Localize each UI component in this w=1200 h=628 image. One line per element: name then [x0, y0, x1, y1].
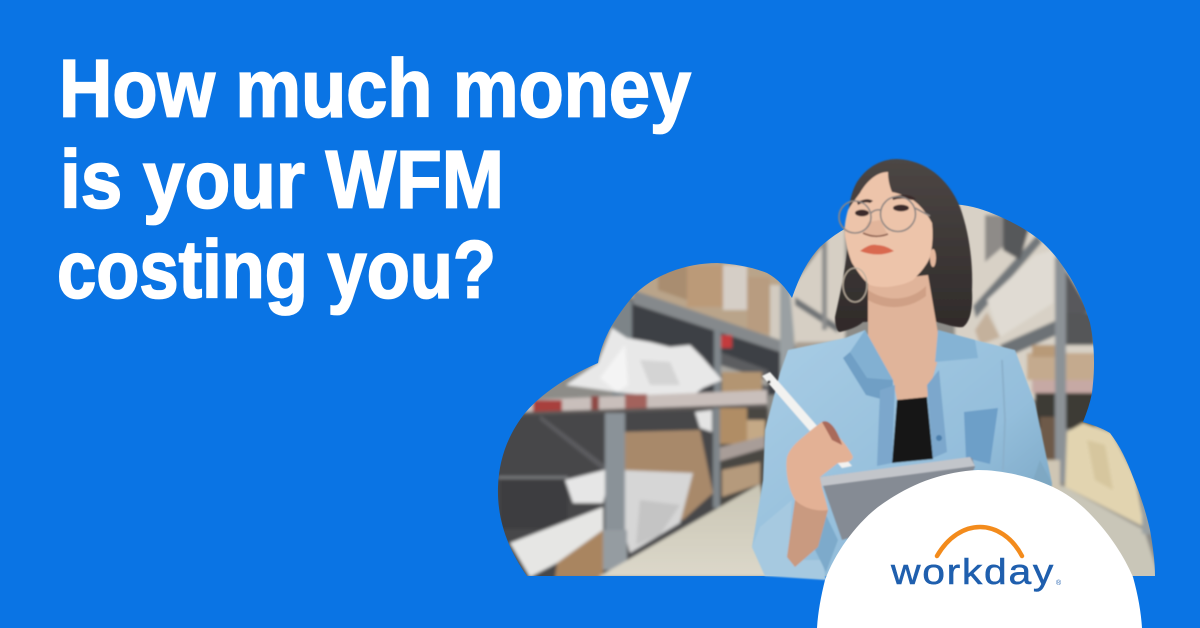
pale stacked cartons: [1065, 423, 1144, 527]
logo arc: [937, 527, 1022, 556]
title: is your WFM: [60, 134, 504, 226]
right of head pale racks: [790, 215, 845, 345]
earring: [843, 268, 867, 302]
ear: [930, 249, 936, 267]
placket: [877, 385, 895, 466]
black top: [892, 397, 933, 463]
lower left dark bay: [498, 408, 717, 576]
stylus: [762, 372, 852, 468]
forearm: [787, 500, 828, 567]
face: [845, 172, 933, 287]
title: costing you?: [57, 224, 496, 316]
lips: [860, 245, 894, 254]
registered mark: ®: [1056, 579, 1062, 587]
cuff: [752, 500, 826, 580]
right aisle: [953, 204, 1094, 402]
workday logo: [890, 527, 1062, 592]
labelled goods strip: [522, 390, 767, 414]
tablet: [820, 458, 975, 540]
neck: [868, 275, 938, 400]
nose: [864, 220, 887, 236]
post: [605, 413, 625, 533]
big cardboard: [623, 430, 713, 520]
mid right shelves: [750, 408, 769, 426]
sleeve seam: [1002, 360, 1005, 470]
eyebrows and eyes: [855, 195, 916, 216]
hair back: [835, 159, 972, 332]
white plastic goods: [618, 470, 693, 553]
left collar: [850, 330, 893, 380]
title: [57, 44, 691, 316]
left aisle top boxes: [630, 263, 781, 338]
white bags: [566, 328, 722, 400]
floor: [598, 484, 778, 577]
white logo cloud: [817, 470, 1142, 628]
warehouse photo background: [490, 200, 1170, 580]
cardboard box: [555, 530, 603, 578]
right floor: [1057, 484, 1155, 576]
dark upper bay: [628, 298, 780, 395]
shirt: [752, 330, 1052, 576]
glasses: [839, 196, 930, 233]
hand: [786, 422, 853, 510]
right collar: [935, 330, 978, 362]
logo wordmark: workday: [890, 551, 1055, 592]
title: How much money: [59, 44, 691, 134]
woman: [752, 159, 1052, 580]
pocket: [964, 408, 998, 464]
